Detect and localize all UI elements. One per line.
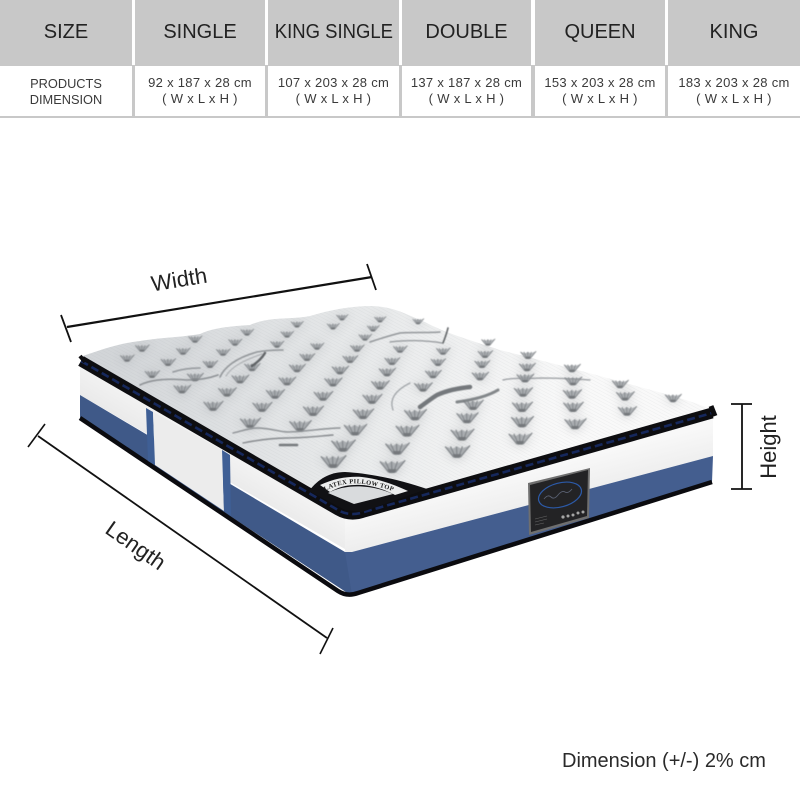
- column: king single: 107 x 203 x 28 cm: [278, 75, 389, 90]
- column: king: ( W x L x H ): [696, 91, 772, 106]
- size table: [0, 0, 800, 118]
- column: king single: KING SINGLE: [274, 21, 393, 43]
- column: queen: ( W x L x H ): [562, 91, 638, 106]
- left side panel: [80, 362, 352, 596]
- corner tag: latex pillow top: LATEX PILLOW TOP: [323, 479, 394, 491]
- tufts, middle rows: [174, 353, 682, 412]
- column: king: 183 x 203 x 28 cm: [678, 75, 790, 90]
- column: double: 137 x 187 x 28 cm: [411, 75, 522, 90]
- label: length: Length: [101, 516, 170, 575]
- column: king single: [268, 0, 399, 116]
- corner tag: latex pillow top: [311, 472, 426, 512]
- top edge piping: [80, 356, 715, 514]
- label icons: [561, 510, 584, 519]
- column: queen: QUEEN: [564, 21, 636, 43]
- column: queen: [535, 0, 665, 116]
- quilted top surface: [82, 306, 705, 488]
- tufts, back rows: [120, 314, 536, 381]
- column: double: DOUBLE: [425, 21, 508, 43]
- column: king: KING: [710, 21, 758, 43]
- column: single: ( W x L x H ): [162, 91, 238, 106]
- tolerance note: Dimension (+/-) 2% cm: [562, 750, 766, 772]
- column: size: DIMENSION: [30, 92, 102, 107]
- tufts, front rows: [240, 400, 637, 473]
- column: queen: 153 x 203 x 28 cm: [544, 75, 656, 90]
- label: height: Height: [756, 415, 781, 479]
- tuft grid: [120, 314, 682, 473]
- dimension arrow: height: [731, 404, 752, 489]
- mattress: [78, 306, 718, 597]
- side handle panel: [146, 408, 231, 516]
- column: single: 92 x 187 x 28 cm: [148, 75, 252, 90]
- column: king: [668, 0, 800, 116]
- product label: [528, 468, 590, 535]
- dimension arrow: width: [61, 264, 376, 342]
- dimension arrow: length: [28, 424, 333, 654]
- column: size: [0, 0, 132, 116]
- column: size: SIZE: [44, 21, 88, 43]
- column: king single: ( W x L x H ): [296, 91, 371, 106]
- front side panel: [345, 414, 713, 595]
- label logo oval: [536, 478, 584, 512]
- fabric creases: [140, 328, 590, 445]
- column: single: SINGLE: [163, 21, 237, 43]
- column: double: ( W x L x H ): [429, 91, 504, 106]
- column: size: PRODUCTS: [30, 76, 102, 91]
- column: single: [135, 0, 265, 116]
- bottom piping: [80, 418, 712, 595]
- column: double: [402, 0, 531, 116]
- soft tuft shading: [120, 314, 682, 473]
- label: width: Width: [149, 263, 209, 296]
